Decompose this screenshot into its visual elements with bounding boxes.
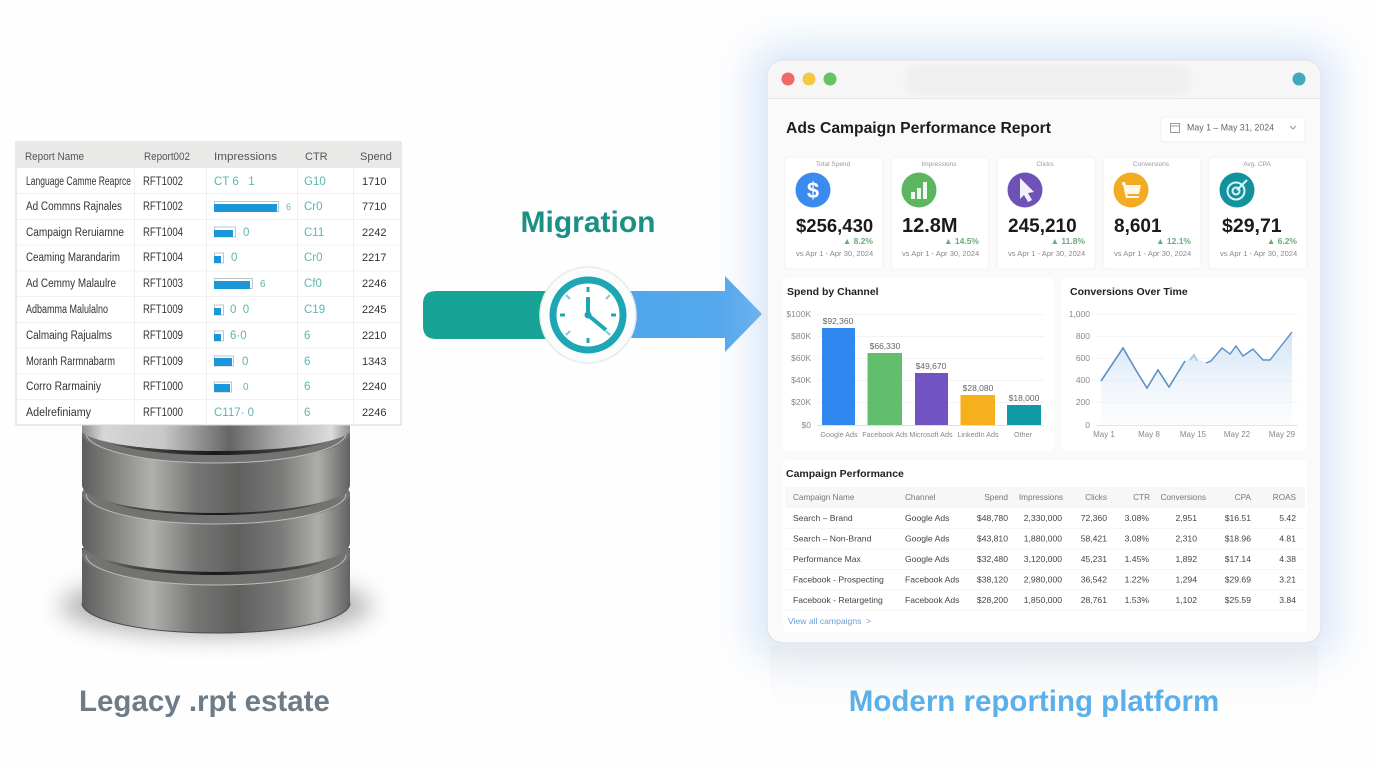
legacy table ctr values: C11: [304, 227, 324, 239]
table header: CPA: [1235, 493, 1252, 502]
conversions date labels: [1093, 430, 1296, 439]
table row 2: 3.08%: [1125, 534, 1149, 544]
legacy table header: Report002: [144, 151, 190, 163]
legacy table report ids: RFT1004: [143, 227, 184, 239]
legacy table report names: Calmaing Rajualms: [26, 330, 112, 342]
kpi card: impressions: [891, 157, 989, 269]
table row 1: 72,360: [1081, 513, 1107, 523]
legacy table header: Spend: [360, 151, 392, 163]
legacy table report ids: RFT1000: [143, 407, 183, 419]
conversions date labels: May 1: [1093, 430, 1115, 439]
table row 3: 3,120,000: [1024, 554, 1062, 564]
table row 2: Google Ads: [905, 534, 949, 544]
spend channel labels: [820, 430, 1033, 439]
table row 5: 1.53%: [1125, 595, 1149, 605]
bar chart: $28,080: [963, 383, 994, 393]
kpi card: impressions: Impressions: [921, 161, 957, 168]
legacy table ctr values: C19: [304, 304, 325, 316]
spend channel labels: Google Ads: [820, 430, 858, 439]
window title bar: [768, 61, 1320, 98]
table row 3: 4.38: [1279, 554, 1296, 564]
legacy table impressions values: CT 6 1: [214, 176, 255, 188]
icon: cursor: [1008, 172, 1042, 208]
table header: Spend: [984, 493, 1008, 502]
legacy table report names: Ad Commns Rajnales: [26, 201, 122, 213]
legacy table report ids: RFT1009: [143, 304, 183, 316]
kpi card: cpa: vs Apr 1 - Apr 30, 2024: [1220, 249, 1297, 258]
spend channel labels: Microsoft Ads: [909, 430, 953, 439]
legacy table report names: [26, 176, 131, 419]
table row 3: [793, 554, 1296, 564]
legacy table ctr values: Cf0: [304, 278, 322, 290]
cylinder tier 2: [82, 464, 350, 572]
table row 4: $29.69: [1225, 574, 1251, 584]
legacy table report ids: RFT1002: [143, 176, 183, 188]
panel: conversions over time: [1061, 278, 1307, 451]
spend axis labels: $100K: [786, 309, 811, 319]
legacy table impressions values: 6: [260, 279, 266, 290]
legacy table report names: Language Camme Reaprce: [26, 176, 131, 188]
kpi card: spend: Total Spend: [816, 161, 851, 168]
legacy table report ids: RFT1002: [143, 201, 183, 213]
table row 4: 2,980,000: [1024, 574, 1062, 584]
legacy table spend values: 2246: [362, 407, 386, 419]
kpi card: clicks: [997, 157, 1095, 269]
panel: campaign performance: [783, 460, 1307, 632]
kpi card: cpa: $29,71: [1222, 215, 1282, 237]
legacy table report names: Moranh Rarmnabarm: [26, 356, 115, 368]
kpi card: clicks: 245,210: [1008, 216, 1077, 237]
table row 1: 5.42: [1279, 513, 1296, 523]
conversions axis labels: 200: [1076, 397, 1090, 407]
legacy table spend values: [362, 176, 386, 419]
table header: CTR: [1133, 493, 1150, 502]
table row 1: Google Ads: [905, 513, 949, 523]
table header: ROAS: [1273, 493, 1297, 502]
bar chart: $66,330: [870, 341, 901, 351]
kpi card: clicks: vs Apr 1 - Apr 30, 2024: [1008, 249, 1085, 258]
table header: Impressions: [1019, 493, 1063, 502]
legacy table report names: Corro Rarmainiy: [26, 381, 101, 393]
table row 3: 45,231: [1081, 554, 1107, 564]
table row 1: [793, 513, 1296, 523]
conversions axis labels: 400: [1076, 375, 1090, 385]
legacy table spend values: 2210: [362, 330, 386, 342]
table row 4: [793, 574, 1296, 584]
icon: dollar: $: [807, 178, 819, 203]
kpi card: spend: vs Apr 1 - Apr 30, 2024: [796, 249, 873, 258]
icon: cart: [1114, 172, 1148, 208]
legacy table report ids: RFT1009: [143, 356, 183, 368]
table row 4: 36,542: [1081, 574, 1107, 584]
legacy table ctr values: 6: [304, 407, 310, 419]
date range picker: [1161, 117, 1305, 142]
table header: [793, 493, 1297, 502]
legacy table report names: Ceaming Marandarim: [26, 252, 120, 264]
table row 2: 1,880,000: [1024, 534, 1062, 544]
window glow: [752, 46, 1336, 658]
legacy table impressions values: 6: [286, 202, 291, 212]
line chart: [1101, 332, 1292, 425]
table row 2: $18.96: [1225, 534, 1251, 544]
legacy table header: CTR: [305, 151, 328, 163]
legacy table impressions values: 0: [243, 227, 249, 239]
legacy table spend values: 2246: [362, 278, 386, 290]
table header: Clicks: [1085, 493, 1107, 502]
kpi card: conversions: [1103, 157, 1201, 269]
conversions date labels: May 8: [1138, 430, 1160, 439]
bar chart: [822, 316, 1041, 425]
table row 5: $25.59: [1225, 595, 1251, 605]
spend axis labels: $40K: [791, 375, 811, 385]
legacy table spend values: 7710: [362, 201, 386, 213]
legacy table impressions values: 0: [242, 356, 248, 368]
legacy table spend values: 2217: [362, 252, 386, 264]
window reflection: [770, 645, 1318, 723]
kpi card: impressions: vs Apr 1 - Apr 30, 2024: [902, 249, 979, 258]
bar chart: $49,670: [916, 361, 947, 371]
legacy table spend values: 2242: [362, 227, 386, 239]
table row 5: 1,850,000: [1024, 595, 1062, 605]
table row 3: Google Ads: [905, 554, 949, 564]
table row 5: $28,200: [977, 595, 1008, 605]
table row 1: $16.51: [1225, 513, 1251, 523]
conversions axis labels: 0: [1085, 420, 1090, 430]
conversions date labels: May 15: [1180, 430, 1207, 439]
legacy table impressions values: [214, 176, 291, 419]
arrow blue head: [610, 276, 762, 352]
cylinder tier 1: [82, 403, 350, 513]
legacy table impressions values: 0: [231, 252, 237, 264]
legacy table header: Impressions: [214, 151, 278, 163]
table row 2: 4.81: [1279, 534, 1296, 544]
table row 2: 58,421: [1081, 534, 1107, 544]
spend axis labels: $80K: [791, 331, 811, 341]
table row 3: $32,480: [977, 554, 1008, 564]
view all link: View all campaigns >: [788, 616, 871, 626]
report title: Ads Campaign Performance Report: [786, 120, 1052, 137]
table row 5: Facebook - Retargeting: [793, 595, 883, 605]
panel: spend by channel: Spend by Channel: [787, 286, 879, 298]
legacy table report names: Ad Cemmy Malaulre: [26, 278, 116, 290]
conversions date labels: May 29: [1269, 430, 1296, 439]
spend channel labels: LinkedIn Ads: [957, 430, 999, 439]
conversions axis labels: 1,000: [1069, 309, 1090, 319]
table row 4: 3.21: [1279, 574, 1296, 584]
table row 1: 2,330,000: [1024, 513, 1062, 523]
table row 1: 3.08%: [1125, 513, 1149, 523]
legacy table spend values: 2240: [362, 381, 386, 393]
table row 3: 1.45%: [1125, 554, 1149, 564]
legacy table report names: Adelrefiniamy: [26, 407, 91, 419]
legacy table report ids: RFT1009: [143, 330, 183, 342]
table row 4: 1,294: [1175, 574, 1197, 584]
cylinder dome: [82, 420, 350, 451]
spend axis labels: $60K: [791, 353, 811, 363]
table row 3: 1,892: [1175, 554, 1197, 564]
kpi card: spend: [785, 157, 883, 269]
table header: Campaign Name: [793, 493, 855, 502]
table row 5: [793, 595, 1296, 605]
legacy table spend values: 1710: [362, 176, 386, 188]
legacy table ctr values: 6: [304, 381, 310, 393]
table row 3: Performance Max: [793, 554, 862, 564]
panel: campaign performance: Campaign Performance: [786, 468, 904, 480]
legacy table ctr values: 6: [304, 330, 310, 342]
kpi card: clicks: Clicks: [1036, 161, 1054, 168]
legacy table spend values: 2245: [362, 304, 386, 316]
legacy table header: Report Name: [25, 151, 84, 163]
table row 5: 28,761: [1081, 595, 1107, 605]
table row 4: Facebook - Prospecting: [793, 574, 884, 584]
table row 3: $17.14: [1225, 554, 1251, 564]
conversions axis labels: 600: [1076, 353, 1090, 363]
kpi card: conversions: Conversions: [1133, 161, 1170, 168]
kpi card: conversions: ▲ 12.1%: [1156, 236, 1191, 246]
table row 5: Facebook Ads: [905, 595, 959, 605]
kpi card: conversions: 8,601: [1114, 216, 1162, 237]
legacy table report names: Campaign Reruiamne: [26, 227, 124, 239]
legacy table ctr values: 6: [304, 356, 310, 368]
legacy table ctr values: [304, 176, 326, 419]
browser window: [767, 60, 1321, 643]
conversions date labels: May 22: [1224, 430, 1251, 439]
legacy table impressions values: C117· 0: [214, 407, 254, 419]
conversions axis labels: [1069, 309, 1090, 430]
table row 4: $38,120: [977, 574, 1008, 584]
table row 1: $48,780: [977, 513, 1008, 523]
spend channel labels: Other: [1014, 430, 1033, 439]
icon: bars: [902, 172, 936, 208]
bar chart: $18,000: [1009, 393, 1040, 403]
spend axis labels: $20K: [791, 397, 811, 407]
kpi card: cpa: [1209, 157, 1307, 269]
table row 1: Search – Brand: [793, 513, 853, 523]
table header: Conversions: [1160, 493, 1206, 502]
table header: Channel: [905, 493, 936, 502]
table row 2: [793, 534, 1296, 544]
table row 2: $43,810: [977, 534, 1008, 544]
kpi card: clicks: ▲ 11.8%: [1051, 236, 1085, 246]
migration arrow: [423, 267, 762, 363]
spend axis labels: $0: [802, 420, 811, 430]
kpi card: conversions: vs Apr 1 - Apr 30, 2024: [1114, 249, 1191, 258]
legacy table ctr values: G10: [304, 176, 326, 188]
panel: spend by channel: [783, 278, 1054, 451]
panel: conversions over time: Conversions Over Time: [1070, 286, 1188, 298]
label: modern platform: Modern reporting platform: [849, 685, 1219, 718]
legacy table report ids: [143, 176, 184, 419]
database cylinder: [60, 403, 372, 636]
table row 5: 3.84: [1279, 595, 1296, 605]
kpi card: spend: $256,430: [796, 215, 873, 236]
legacy report table: [16, 142, 401, 425]
legacy table report ids: RFT1000: [143, 381, 183, 393]
cylinder tier 3: [82, 525, 350, 633]
legacy table impressions values: 6·0: [230, 330, 247, 342]
arrow teal tail: [423, 291, 560, 339]
table row 2: 2,310: [1175, 534, 1197, 544]
kpi card: spend: ▲ 8.2%: [843, 236, 873, 246]
kpi card: cpa: ▲ 6.2%: [1267, 236, 1297, 246]
legacy table report ids: RFT1003: [143, 278, 183, 290]
label: migration: Migration: [520, 206, 656, 239]
label: legacy: Legacy .rpt estate: [79, 685, 330, 718]
table row 1: 2,951: [1175, 513, 1197, 523]
spend channel labels: Facebook Ads: [862, 430, 908, 439]
icon: clock: [540, 267, 636, 363]
legacy table spend values: 1343: [362, 356, 386, 368]
legacy table report ids: RFT1004: [143, 252, 184, 264]
table row 2: Search – Non-Brand: [793, 534, 872, 544]
legacy table impressions bars: [214, 202, 278, 392]
spend axis labels: [786, 309, 811, 430]
table row 5: 1,102: [1175, 595, 1197, 605]
conversions axis labels: 800: [1076, 331, 1090, 341]
table row 4: Facebook Ads: [905, 574, 959, 584]
kpi card: impressions: ▲ 14.5%: [944, 236, 979, 246]
legacy table report names: Adbamma Malulalno: [26, 304, 108, 316]
table row 4: 1.22%: [1125, 574, 1149, 584]
legacy table ctr values: Cr0: [304, 201, 323, 213]
kpi card: impressions: 12.8M: [902, 215, 958, 237]
legacy table header: [25, 151, 392, 163]
icon: target: [1220, 172, 1254, 208]
legacy table impressions values: 0 0: [230, 304, 249, 316]
date range picker: May 1 – May 31, 2024: [1187, 122, 1274, 132]
legacy table impressions values: 0: [243, 382, 249, 393]
legacy table ctr values: Cr0: [304, 252, 323, 264]
bar chart: $92,360: [823, 316, 854, 326]
kpi card: cpa: Avg. CPA: [1243, 161, 1271, 168]
